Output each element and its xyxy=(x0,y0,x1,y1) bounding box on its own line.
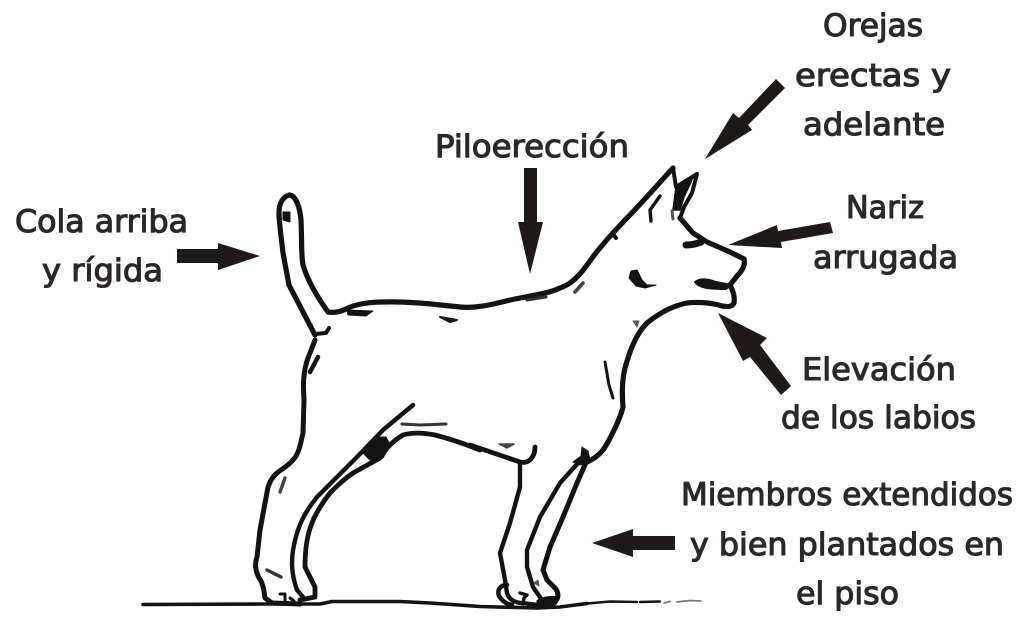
label: piloereccion: Piloerección xyxy=(435,129,629,165)
elbow xyxy=(573,447,590,465)
label: cola xyxy=(15,204,188,289)
label: nariz xyxy=(813,190,958,276)
arrow: ears xyxy=(705,79,785,159)
arrow: limbs xyxy=(592,529,675,557)
arrow: lips xyxy=(718,313,791,395)
label: orejas: erectas y xyxy=(795,58,951,94)
ground line xyxy=(143,600,701,608)
nose wrinkle xyxy=(686,242,701,245)
label: miembros xyxy=(681,477,1013,612)
label: cola: Cola arriba xyxy=(15,204,188,240)
forepaw xyxy=(498,580,558,608)
label: nariz: Nariz xyxy=(846,190,924,226)
fur marks xyxy=(267,196,673,601)
label: orejas: adelante xyxy=(803,107,945,143)
muzzle and jaw xyxy=(587,218,744,462)
label: elevacion: Elevación xyxy=(802,352,956,388)
hind leg line one xyxy=(292,405,413,597)
label: cola: y rígida xyxy=(42,253,163,289)
hind leg outer xyxy=(256,340,315,604)
arrow: nose xyxy=(728,222,833,248)
label: nariz: arrugada xyxy=(813,240,958,276)
dog illustration xyxy=(143,168,744,608)
label: miembros: Miembros extendidos xyxy=(681,477,1013,513)
eye xyxy=(629,270,656,288)
belly xyxy=(470,445,535,462)
arrow: tail xyxy=(177,243,260,270)
hind leg line two xyxy=(300,433,480,600)
ears xyxy=(673,168,697,218)
label: miembros: el piso xyxy=(796,576,899,612)
lip xyxy=(695,279,731,289)
front leg outer xyxy=(543,460,587,604)
label: orejas: Orejas xyxy=(823,8,923,44)
label: miembros: y bien plantados en xyxy=(690,527,1004,563)
front leg inner xyxy=(527,463,578,600)
tail base tick xyxy=(315,328,329,334)
label: elevacion xyxy=(781,352,976,436)
label: orejas xyxy=(795,8,951,143)
tail and back outline xyxy=(279,168,673,335)
label: elevacion: de los labios xyxy=(781,400,976,436)
rear front leg xyxy=(500,463,538,605)
arrow: piloerection xyxy=(518,168,543,274)
joint blob xyxy=(363,437,390,460)
